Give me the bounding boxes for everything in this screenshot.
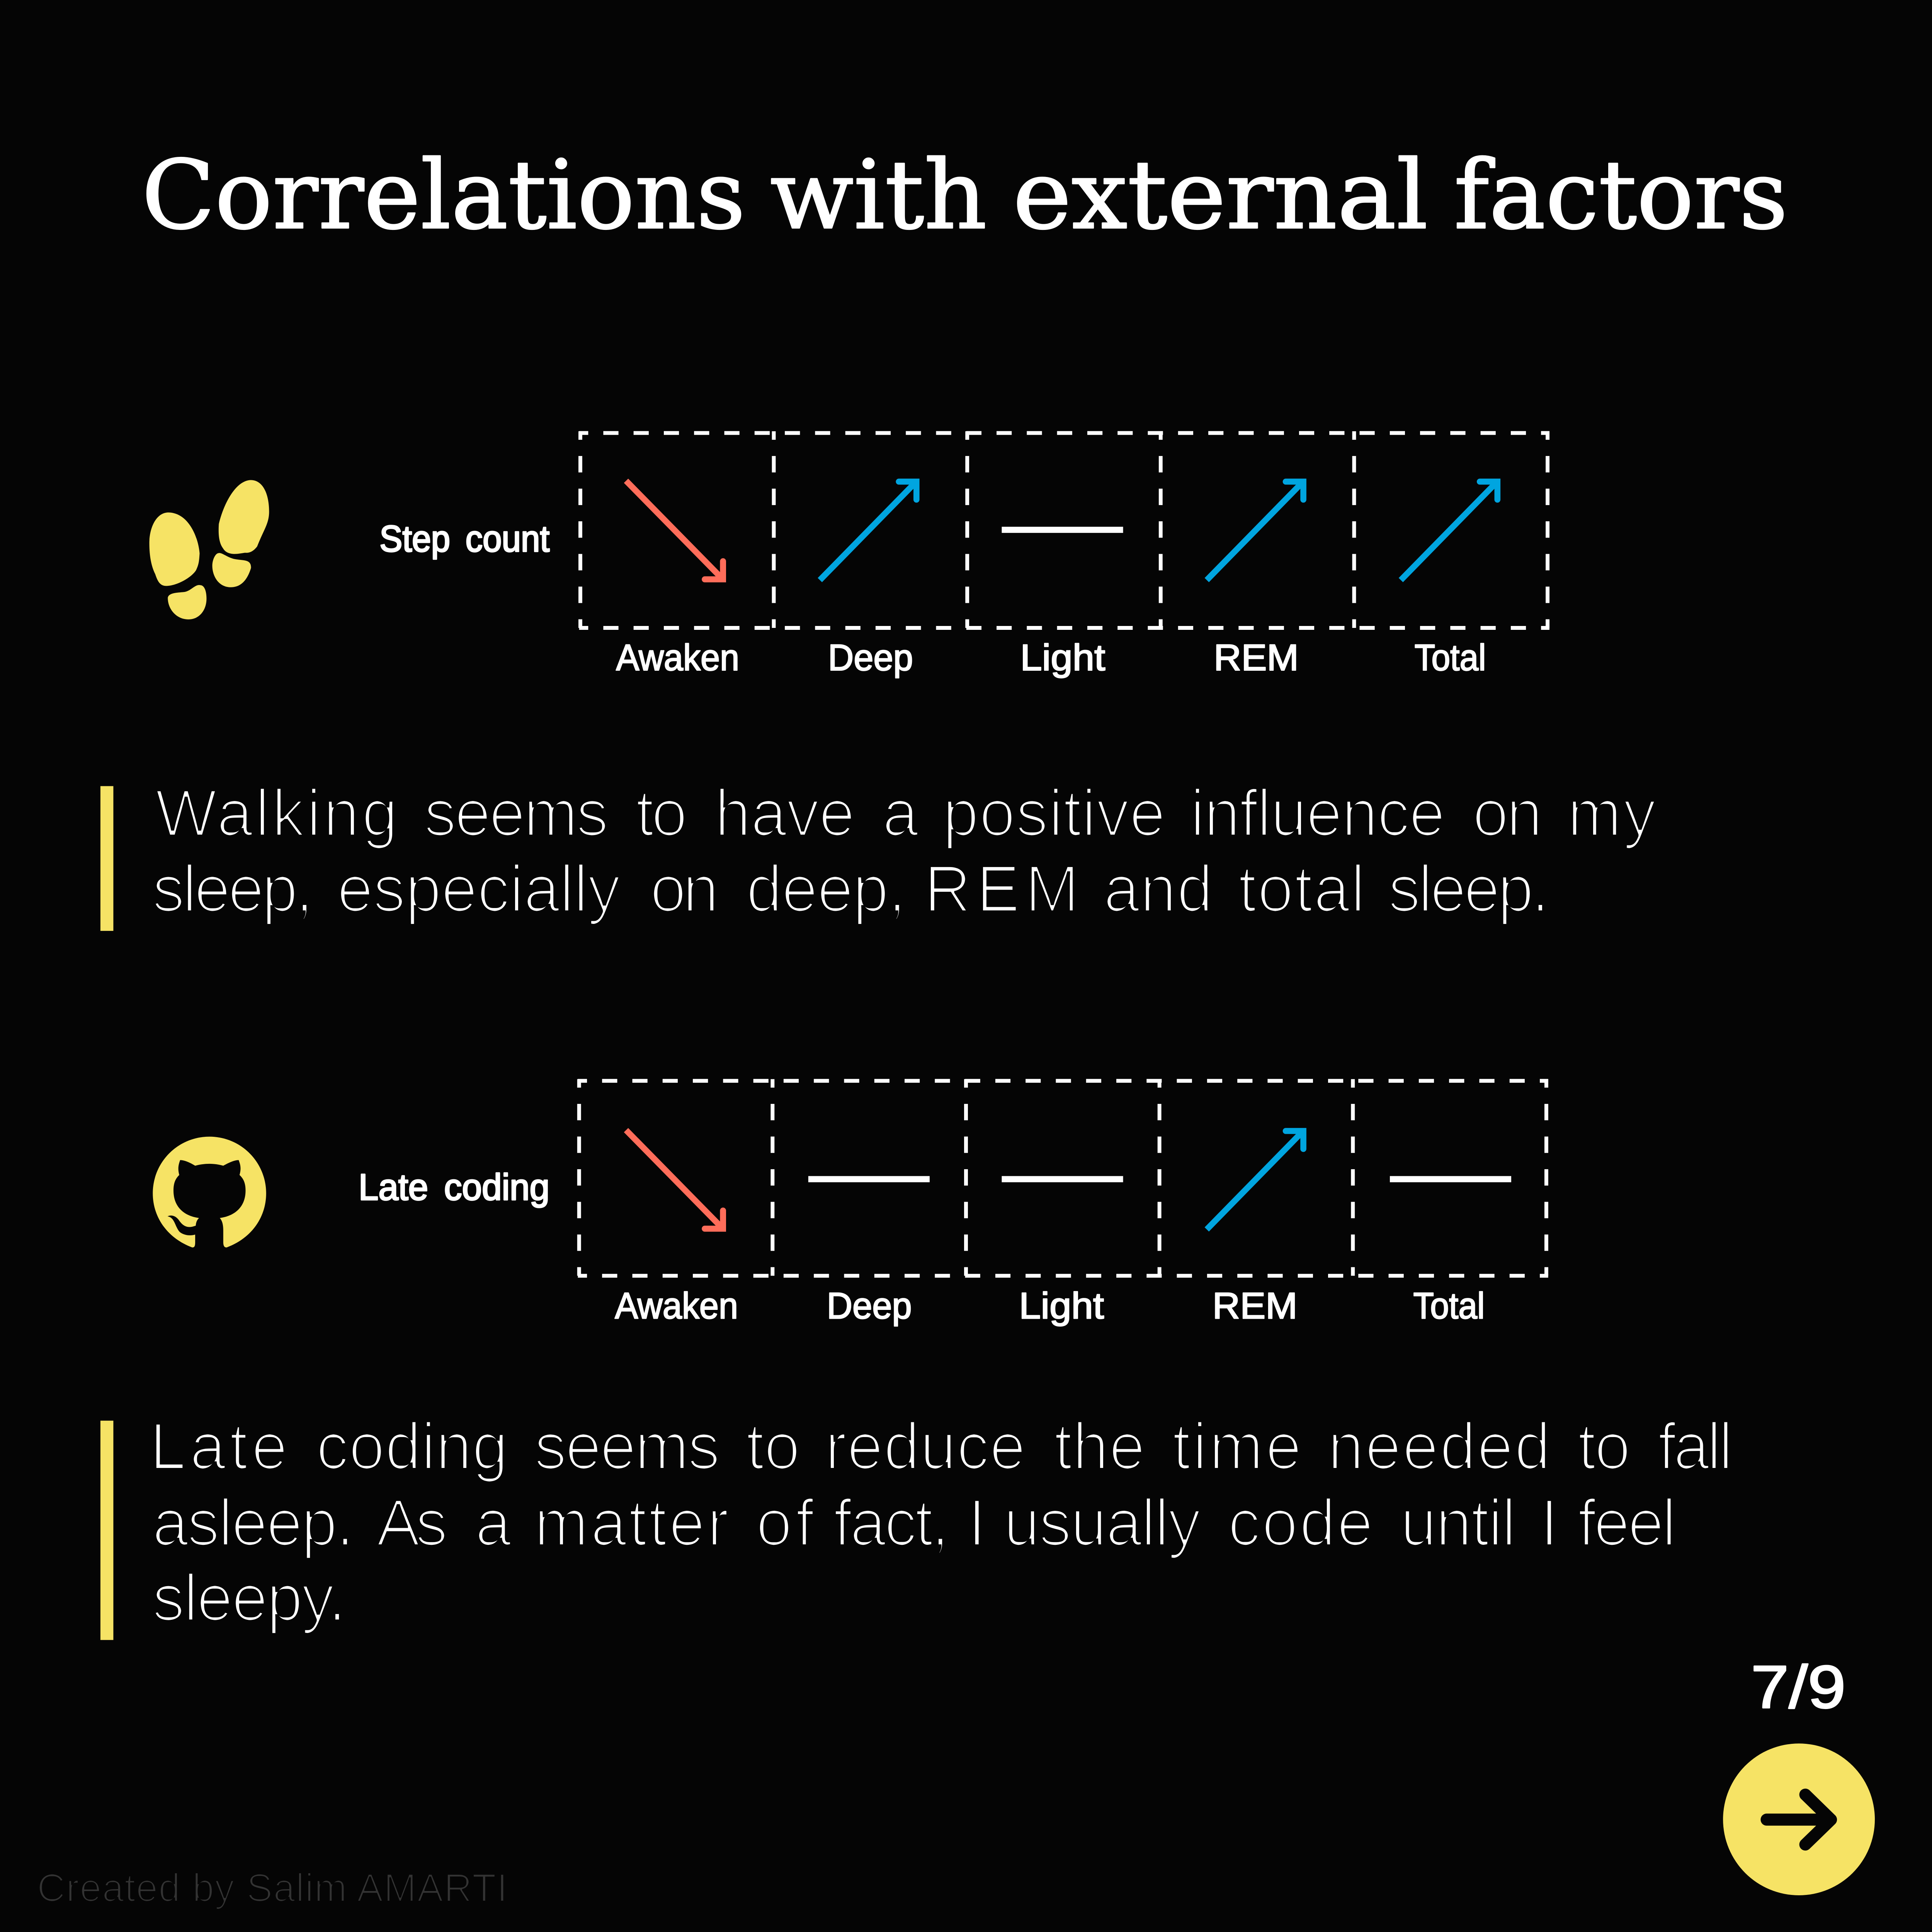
- line: light flat: [1002, 1178, 1123, 1180]
- text block: walking note: have: [714, 777, 855, 850]
- text block: coding note: code: [1228, 1487, 1373, 1560]
- label: step count: Step count: [379, 519, 550, 560]
- text block: walking note: to: [636, 777, 687, 850]
- arrow: total up: [1401, 481, 1497, 580]
- title: Correlations: [142, 142, 745, 252]
- title: factors: [1454, 142, 1788, 252]
- column labels: Deep: [827, 1286, 912, 1327]
- icon: footprints: [149, 480, 269, 619]
- text block: walking note: my: [1567, 777, 1656, 850]
- text block: coding note: time: [1172, 1411, 1302, 1483]
- panel: step count: [149, 431, 1549, 679]
- line: total flat: [1390, 1178, 1511, 1180]
- arrow: deep up: [820, 481, 917, 580]
- bar: coding note: [100, 1421, 113, 1640]
- line: deep flat: [808, 1178, 930, 1180]
- text block: walking note: sleep,: [152, 853, 314, 926]
- text block: walking note: deep,: [746, 853, 906, 926]
- dashed grid: [579, 431, 1549, 628]
- text block: coding note: As: [376, 1487, 448, 1560]
- text block: walking note: especially: [337, 853, 621, 926]
- arrow: awaken down: [626, 1130, 723, 1229]
- text block: walking note: total: [1238, 853, 1365, 926]
- text block: walking note: influence: [1190, 777, 1445, 850]
- text block: coding note: to: [1578, 1411, 1631, 1483]
- column labels: REM: [1214, 638, 1299, 679]
- text block: coding note: sleepy.: [152, 1562, 346, 1635]
- arrow: REM up: [1207, 481, 1303, 580]
- text block: coding note: until: [1400, 1487, 1516, 1560]
- arrow: awaken down: [626, 481, 723, 579]
- text block: coding note: I: [968, 1487, 986, 1560]
- text block: walking note: a: [882, 777, 919, 850]
- text block: walking note: REM: [924, 853, 1079, 926]
- text block: coding note: fact,: [833, 1487, 949, 1560]
- icon: github: [153, 1137, 266, 1247]
- column labels: Light: [1020, 638, 1106, 679]
- text block: walking note: sleep.: [1388, 853, 1549, 926]
- button: next arrow: [1723, 1743, 1875, 1895]
- arrow: REM up: [1207, 1131, 1303, 1230]
- column labels: Total: [1413, 1286, 1485, 1327]
- column labels: Awaken: [615, 1286, 738, 1327]
- column labels: [616, 638, 1486, 679]
- text block: coding note: the: [1054, 1411, 1145, 1483]
- text block: coding note: Late: [150, 1411, 288, 1483]
- text block: coding note: needed: [1328, 1411, 1551, 1483]
- column labels: Total: [1415, 638, 1486, 679]
- text block: walking note: seems: [424, 777, 609, 850]
- bar: walking note: [100, 786, 113, 931]
- column labels: Awaken: [616, 638, 739, 679]
- text block: coding note: [150, 1411, 1733, 1635]
- text block: walking note: [152, 777, 1656, 926]
- title: with: [770, 142, 987, 252]
- text block: walking note: positive: [942, 777, 1166, 850]
- text block: coding note: a: [475, 1487, 512, 1560]
- text block: walking note: Walking: [155, 777, 398, 850]
- text block: coding note: usually: [1003, 1487, 1201, 1560]
- text block: coding note: asleep.: [152, 1487, 354, 1560]
- footer credit: Created by Salim AMARTI: [37, 1866, 508, 1910]
- text block: walking note: and: [1104, 853, 1213, 926]
- dashed grid: [578, 1079, 1548, 1276]
- text block: coding note: coding: [316, 1411, 508, 1483]
- text block: coding note: matter: [534, 1487, 729, 1560]
- text block: coding note: of: [756, 1487, 814, 1560]
- text block: walking note: on: [1473, 777, 1543, 850]
- text block: coding note: I: [1540, 1487, 1558, 1560]
- column labels: REM: [1213, 1286, 1298, 1327]
- text block: coding note: to: [746, 1411, 800, 1483]
- label: late coding: Late coding: [359, 1168, 549, 1209]
- column labels: Light: [1019, 1286, 1105, 1327]
- line: light flat: [1002, 529, 1123, 531]
- text block: coding note: fall: [1658, 1411, 1733, 1483]
- text block: walking note: on: [650, 853, 719, 926]
- text block: coding note: feel: [1578, 1487, 1676, 1560]
- text block: coding note: seems: [534, 1411, 720, 1483]
- page number: 7/9: [1751, 1655, 1846, 1721]
- text block: coding note: reduce: [825, 1411, 1026, 1483]
- title: external: [1013, 142, 1428, 252]
- column labels: [615, 1286, 1485, 1327]
- column labels: Deep: [828, 638, 913, 679]
- panel: late coding: [153, 1079, 1548, 1327]
